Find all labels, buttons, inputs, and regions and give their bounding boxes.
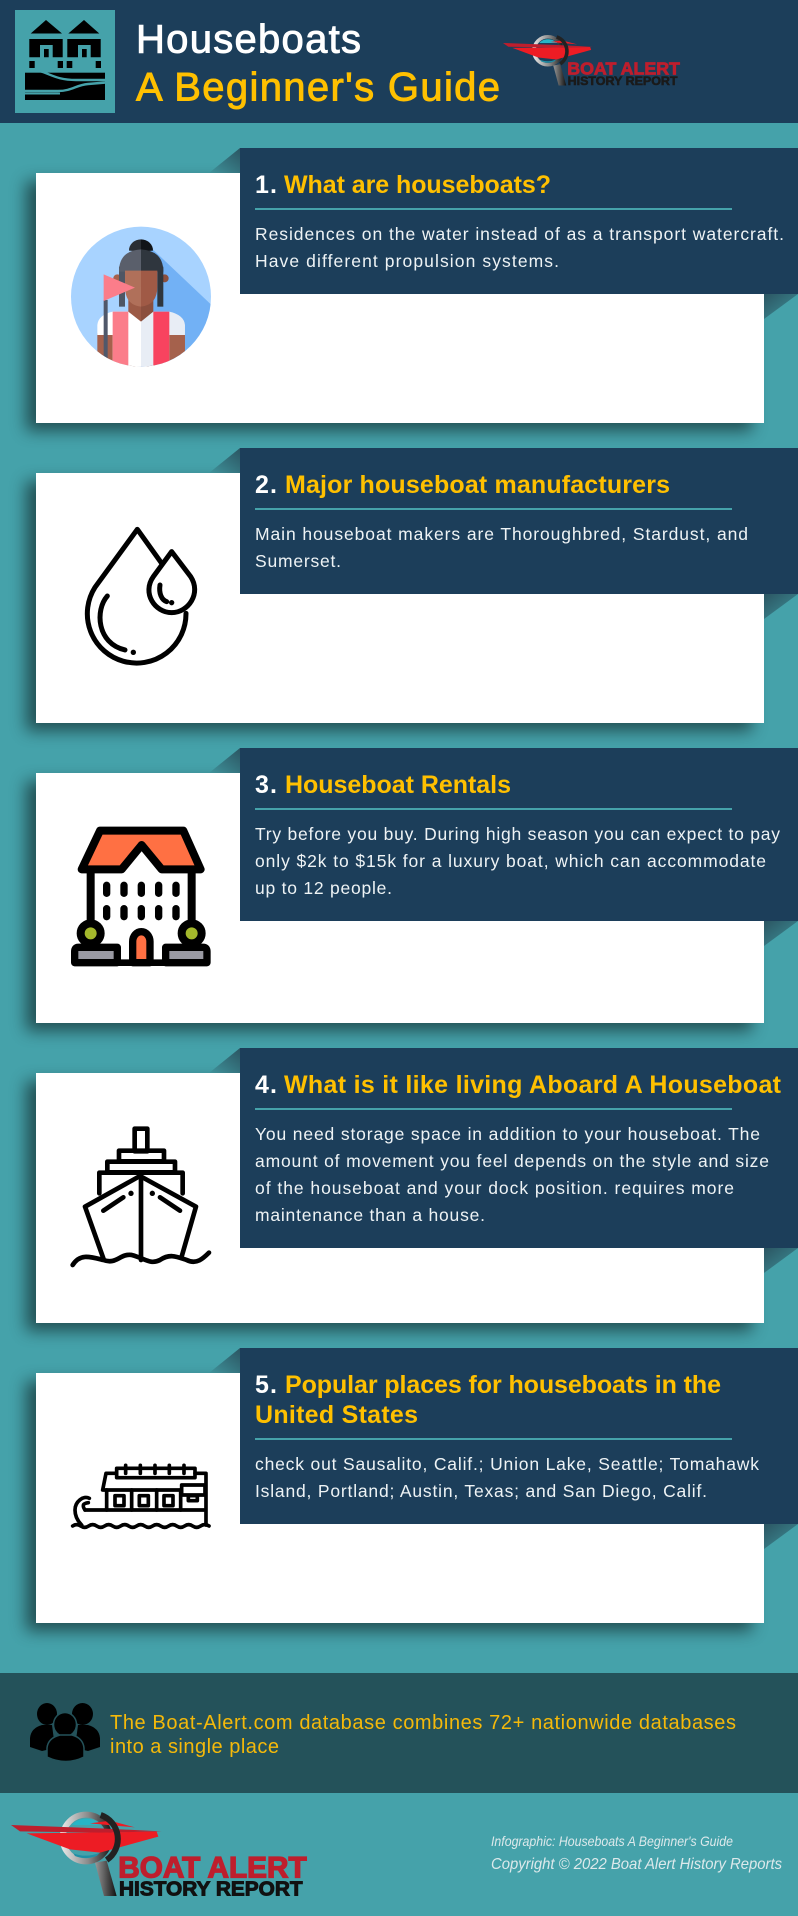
- icon: water drops: [87, 529, 195, 663]
- text: section 4 body: [255, 1124, 769, 1225]
- icon: houseboat: [73, 1465, 209, 1527]
- heading: section 3: Houseboat Rentals: [285, 771, 511, 799]
- heading: section 2: 2.: [255, 471, 277, 499]
- text: section 5 body: [255, 1454, 759, 1501]
- panel: section 3: [26, 748, 798, 1031]
- logo: Boat Alert header: HISTORY REPORT: [568, 74, 678, 88]
- text: section 1 body: Have different propulsion systems.: [255, 251, 559, 271]
- text: footer credits: [491, 1833, 782, 1873]
- text: section 2 body: Main houseboat makers are Thoroughbred, Stardust, and: [255, 524, 748, 544]
- heading: section 5: 5.: [255, 1371, 277, 1399]
- heading: section 2: Major houseboat manufacturers: [285, 471, 670, 499]
- text: section 1 body: [255, 224, 784, 271]
- text: section 2 body: Sumerset.: [255, 551, 341, 571]
- icon: houses on water: [15, 10, 115, 113]
- text: section 3 body: Try before you buy. During high season you can expect to pay: [255, 824, 780, 844]
- text: section 3 body: [255, 824, 780, 898]
- heading: section 5: Popular places for houseboats in the: [285, 1371, 721, 1399]
- text: section 1 body: Residences on the water instead of as a transport watercraft.: [255, 224, 784, 244]
- heading: section 1: What are houseboats?: [284, 171, 551, 199]
- text: footer credits: Infographic: Houseboats A Beginner's Guide: [491, 1833, 733, 1849]
- logo: Boat Alert footer: HISTORY REPORT: [119, 1878, 303, 1901]
- heading: section 1: 1.: [255, 171, 277, 199]
- panel: section 5: [26, 1348, 798, 1631]
- icon: ship: [73, 1129, 209, 1265]
- text: section 5 body: check out Sausalito, Calif.; Union Lake, Seattle; Tomahawk: [255, 1454, 759, 1474]
- text: section 3 body: up to 12 people.: [255, 878, 392, 898]
- text: database message: The Boat-Alert.com database combines 72+ nationwide databases: [110, 1712, 736, 1734]
- logo: Boat Alert header: [503, 37, 680, 88]
- icon: person with flag: [71, 227, 213, 370]
- panel: section 2: [26, 448, 798, 731]
- text: database message: into a single place: [110, 1736, 279, 1758]
- panel: section 4: [26, 1048, 798, 1331]
- heading: section 5: [255, 1371, 721, 1429]
- heading: section 5: United States: [255, 1401, 418, 1429]
- logo: Boat Alert header: BOAT ALERT: [567, 58, 680, 78]
- text: section 2 body: [255, 524, 748, 571]
- heading: section 4: What is it like living Aboard A Houseboat: [284, 1071, 782, 1099]
- text: section 4 body: maintenance than a house.: [255, 1205, 485, 1225]
- title: A Beginner's Guide: A Beginner's Guide: [136, 66, 500, 110]
- icon: group of people: [30, 1703, 100, 1762]
- panel: section 1: [26, 148, 798, 431]
- text: section 3 body: only $2k to $15k for a luxury boat, which can accommodate: [255, 851, 766, 871]
- text: footer credits: Copyright © 2022 Boat Alert History Reports: [491, 1856, 782, 1873]
- callout band: database: [0, 1673, 798, 1793]
- text: section 4 body: of the houseboat and your dock position. requires more: [255, 1178, 734, 1198]
- logo: Boat Alert footer: BOAT ALERT: [118, 1851, 307, 1884]
- header band: [0, 0, 798, 123]
- text: database message: [110, 1712, 736, 1758]
- text: section 5 body: Island, Portland; Austin, Texas; and San Diego, Calif.: [255, 1481, 707, 1501]
- icon: mansion: [75, 831, 207, 963]
- heading: section 4: 4.: [255, 1071, 277, 1099]
- logo: Boat Alert footer: [11, 1815, 307, 1901]
- title: Houseboats: Houseboats: [136, 18, 361, 62]
- text: section 4 body: You need storage space in addition to your houseboat. The: [255, 1124, 760, 1144]
- heading: section 3: 3.: [255, 771, 277, 799]
- text: section 4 body: amount of movement you feel depends on the style and size: [255, 1151, 769, 1171]
